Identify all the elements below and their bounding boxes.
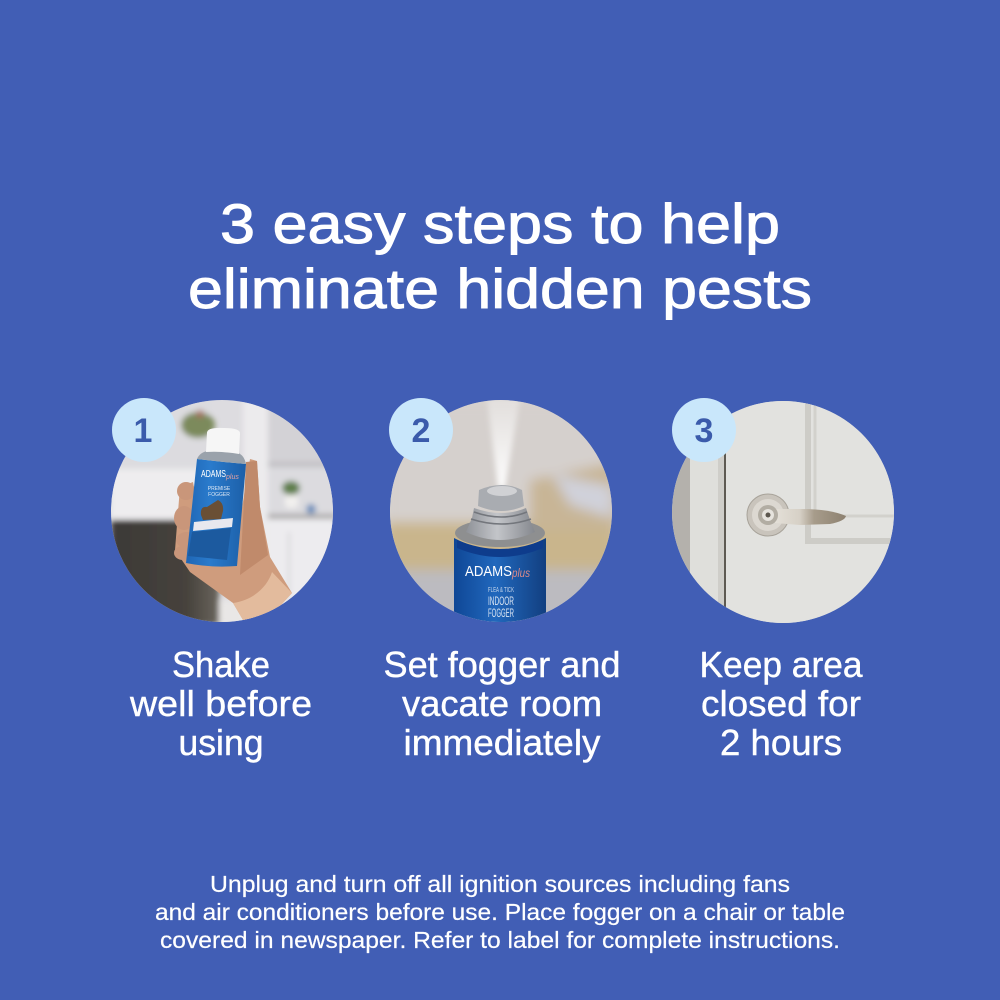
photo: fogger spraying: FLEA & TICK [488, 587, 514, 594]
photo: hand holding can: PREMISE [208, 486, 231, 492]
can label: ADAMS [465, 563, 512, 580]
photo: fogger spraying: INDOOR [488, 594, 514, 608]
photo: hand holding can [111, 400, 336, 626]
caption 1: well before [129, 683, 312, 724]
photo: fogger spraying [385, 398, 617, 630]
caption 3 [700, 644, 863, 763]
footer note: covered in newspaper. Refer to label for complete instructions. [160, 927, 840, 953]
badge 1 [112, 398, 176, 462]
footer note: and air conditioners before use. Place fogger on a chair or table [155, 899, 845, 925]
nozzle [478, 485, 524, 511]
footer note [155, 871, 845, 953]
can collar [466, 508, 535, 540]
spray mist [488, 400, 519, 486]
can [186, 459, 246, 567]
can body [454, 538, 546, 625]
footer note: Unplug and turn off all ignition sources including fans [210, 871, 790, 897]
badge 2 [389, 398, 453, 462]
photo: fogger spraying: plus [511, 566, 530, 580]
photo: door handle [672, 400, 898, 624]
caption 2: vacate room [402, 683, 602, 724]
caption 2 [384, 644, 620, 763]
hand [175, 459, 292, 626]
caption 1: Shake [172, 644, 270, 685]
step 3 panel [672, 398, 898, 763]
caption 3: closed for [701, 683, 861, 724]
step 2 panel [384, 398, 620, 763]
caption 1: using [178, 722, 264, 763]
caption 2: Set fogger and [384, 644, 620, 685]
photo: fogger spraying: FOGGER [488, 606, 514, 620]
number 3: 3 [695, 412, 713, 450]
knob [747, 494, 789, 536]
step 1 panel [111, 398, 336, 763]
photo: hand holding can: FOGGER [208, 492, 230, 498]
can rim [455, 522, 545, 547]
badge 3 [672, 398, 736, 462]
fingers [174, 482, 194, 560]
caption 3: 2 hours [720, 722, 842, 763]
number 1: 1 [134, 412, 152, 450]
number 2: 2 [412, 412, 430, 450]
photo: hand holding can: plus [225, 474, 239, 481]
title: eliminate hidden pests [188, 257, 812, 320]
caption 3: Keep area [700, 644, 863, 685]
caption 1 [129, 644, 312, 763]
can label: ADAMS [201, 469, 226, 480]
title: 3 easy steps to help [220, 192, 780, 255]
caption 2: immediately [404, 722, 600, 763]
title [188, 192, 812, 320]
